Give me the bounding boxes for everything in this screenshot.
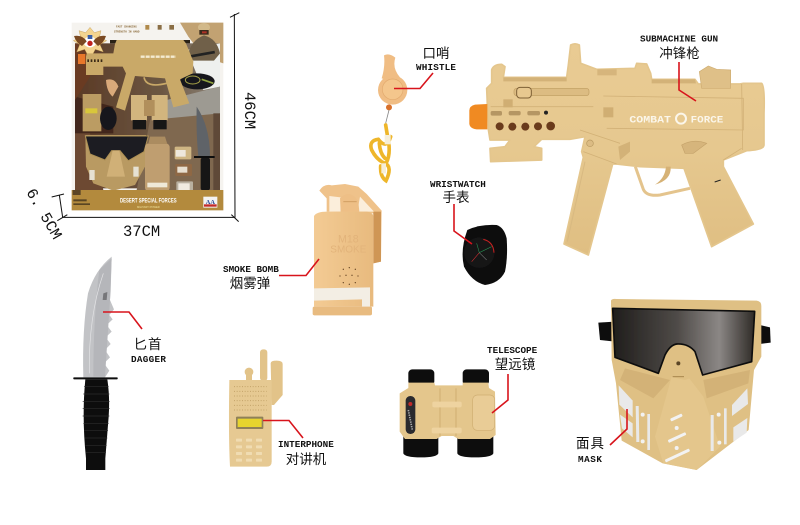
label: submachine gun: SUBMACHINE GUN	[640, 34, 718, 44]
vent holes	[496, 122, 555, 131]
grenade lever and cap	[319, 184, 382, 263]
handle	[84, 379, 109, 470]
bottom gold band: MILITARY POWER	[137, 205, 160, 209]
gun lettering: FORCE	[691, 115, 723, 126]
label: submachine gun	[640, 34, 718, 101]
label: telescope: TELESCOPE	[487, 345, 538, 356]
cocking slot	[514, 87, 589, 98]
bottom gold band	[72, 190, 223, 210]
mini whistle	[106, 79, 118, 97]
label: telescope	[487, 345, 538, 413]
label: smoke bomb: 烟雾弹	[230, 276, 270, 291]
trigger	[655, 167, 671, 185]
bottom gold band: AA	[206, 199, 215, 206]
mini binoculars	[131, 95, 168, 129]
label: whistle: 口哨	[422, 46, 450, 61]
label: wristwatch: WRISTWATCH	[430, 179, 486, 190]
emblem	[73, 27, 107, 59]
mini watch	[100, 107, 117, 130]
yellow screen	[236, 417, 263, 429]
label: whistle: WHISTLE	[416, 62, 456, 73]
interphone	[229, 349, 283, 467]
package box	[72, 23, 223, 210]
blade	[83, 257, 114, 377]
label: mask	[576, 409, 627, 465]
lanyard	[371, 125, 391, 181]
mini accessories	[175, 147, 193, 193]
rear sight block	[699, 66, 731, 88]
antennas	[245, 349, 283, 405]
smoke bomb: SMOKE	[330, 245, 367, 256]
panel: product package with dimensions	[52, 13, 239, 222]
smoke bomb: M18	[338, 234, 359, 246]
label: submachine gun: 冲锋枪	[659, 45, 700, 61]
label: interphone: 对讲机	[286, 452, 327, 467]
gun lettering: COMBAT	[629, 115, 671, 126]
mini mask	[85, 135, 148, 191]
telescope binoculars	[400, 369, 496, 457]
smoke bomb	[313, 184, 382, 315]
wristwatch	[463, 225, 507, 285]
binocular badge	[406, 396, 415, 434]
goggle lens	[613, 308, 755, 375]
gun lettering	[629, 114, 723, 126]
label: smoke bomb	[223, 259, 319, 291]
dimension: 6.5CM: 6. 5CM	[22, 186, 65, 243]
soldier figure	[185, 23, 220, 61]
label: interphone: INTERPHONE	[278, 439, 334, 450]
label: wristwatch	[430, 179, 486, 244]
straps	[598, 322, 615, 342]
grip mark	[715, 180, 721, 182]
mask	[598, 299, 771, 470]
whistle	[371, 54, 407, 181]
label: mask: 面具	[576, 436, 605, 451]
label: dagger	[103, 312, 166, 365]
package top text: STRENGTH IN HAND	[114, 30, 140, 33]
label: telescope: 望远镜	[495, 357, 536, 372]
package top text	[114, 25, 174, 33]
vent panels	[619, 385, 748, 451]
orange muzzle	[469, 104, 487, 129]
dagger	[73, 257, 118, 470]
label: dagger: 匕首	[134, 337, 162, 352]
package top text: FAST CHANGING	[116, 26, 137, 29]
mini dagger	[194, 107, 215, 191]
label: mask: MASK	[578, 454, 602, 465]
submachine gun	[469, 44, 764, 255]
mini interphone	[83, 94, 101, 131]
trigger guard	[635, 167, 690, 195]
label: whistle	[394, 46, 456, 88]
bottom gold band: DESERT SPECIAL FORCES	[120, 198, 177, 205]
guard	[73, 377, 118, 379]
label: smoke bomb: SMOKE BOMB	[223, 264, 279, 275]
mini grenade	[145, 137, 170, 192]
dimension: 46CM: 46CM	[240, 92, 258, 129]
dimension: 37CM: 37CM	[123, 223, 160, 241]
mini gun	[86, 40, 193, 111]
keypad	[236, 439, 262, 462]
label: interphone	[263, 420, 334, 467]
speaker grille	[234, 387, 267, 410]
label: wristwatch: 手表	[442, 190, 470, 205]
label: dagger: DAGGER	[131, 354, 166, 365]
dimension lines	[52, 13, 239, 222]
white band	[314, 287, 370, 307]
nose bridge	[667, 350, 698, 380]
mini badge	[180, 73, 215, 89]
